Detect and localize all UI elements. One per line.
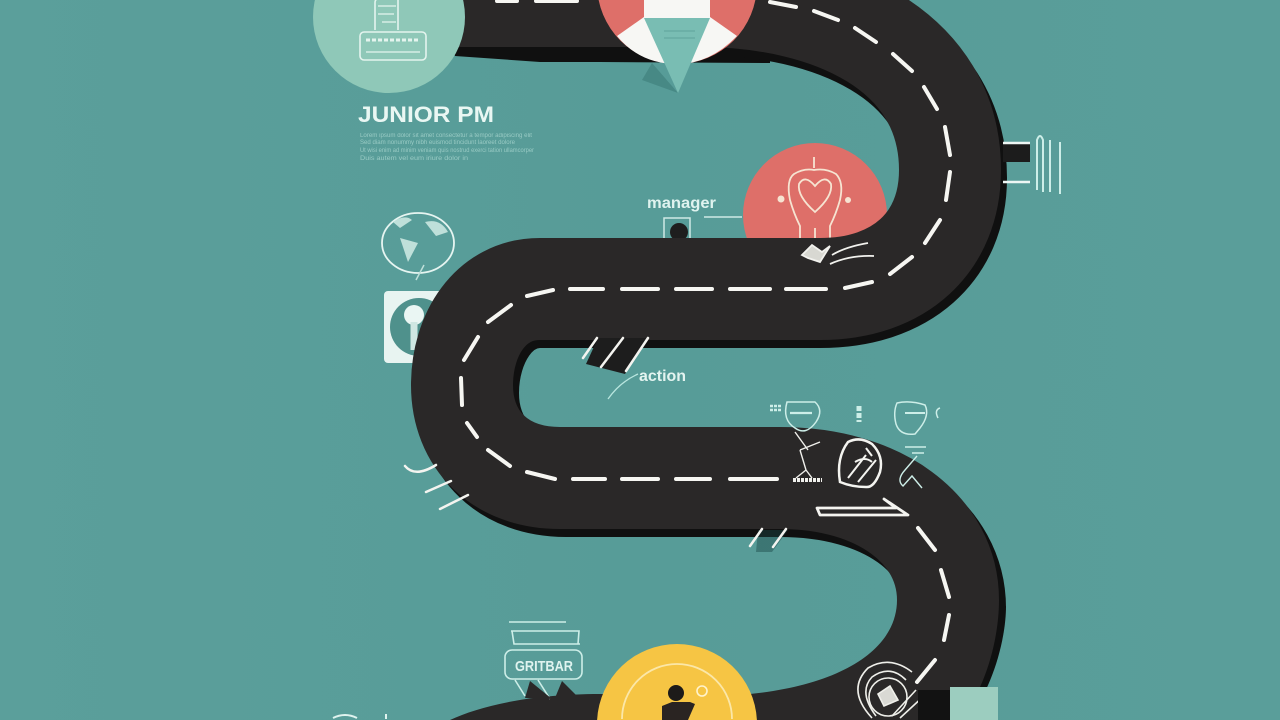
icon: stacked note with speech bubble — [505, 622, 582, 699]
road — [430, 0, 1006, 720]
icon: mint circle with certificate — [313, 0, 465, 93]
arrow — [817, 499, 908, 515]
label: gritbar: GRITBAR — [515, 658, 573, 675]
road details: stubs right — [1003, 136, 1060, 194]
icon: concentric sketch circle — [858, 662, 926, 718]
label: manager: manager — [647, 195, 716, 212]
icons: three sketch figures — [770, 402, 940, 488]
mint square with shadow — [918, 687, 998, 720]
icon: globe — [382, 213, 454, 280]
road centre dashes — [461, 1, 950, 682]
road details: stripes under curve — [583, 338, 648, 374]
text block: junior PM description: Duis autem vel eum iriure dolor in — [360, 156, 468, 162]
text block: junior PM description: Sed diam nonummy nibh euismod tincidunt laoreet dolore — [360, 140, 516, 146]
icon: road spikes under bubble — [525, 681, 580, 699]
text block: junior PM description: Ut wisi enim ad minim veniam quis nostrud exerci tation ullamcorper — [360, 148, 534, 154]
road details: left side stubs — [405, 465, 468, 509]
text block: junior PM description — [360, 133, 534, 162]
text block: junior PM description: Lorem ipsum dolor sit amet consectetur a tempor adipiscing elit — [360, 133, 532, 139]
road shadow bottom section — [900, 606, 1006, 720]
label: action: action — [639, 368, 686, 385]
icon: egg-shaped sketch — [839, 439, 881, 487]
icon: yellow circle with person — [597, 644, 757, 720]
icon: red lightbulb circle — [743, 143, 887, 287]
road shadow top edge — [450, 40, 770, 63]
icon: key card — [384, 291, 448, 363]
label: action — [608, 368, 686, 399]
icon: red location pin — [597, 0, 757, 93]
road details: stripes lower — [750, 529, 788, 552]
road surface bottom section — [450, 600, 999, 720]
heading: Junior PM: JUNIOR PM — [358, 102, 494, 127]
icon: small manager figure — [664, 217, 742, 241]
icon: partial bottom-left marks — [333, 714, 386, 719]
road details: hand sketch — [802, 243, 874, 264]
road surface — [430, 0, 950, 600]
road shadow edge — [430, 4, 956, 608]
